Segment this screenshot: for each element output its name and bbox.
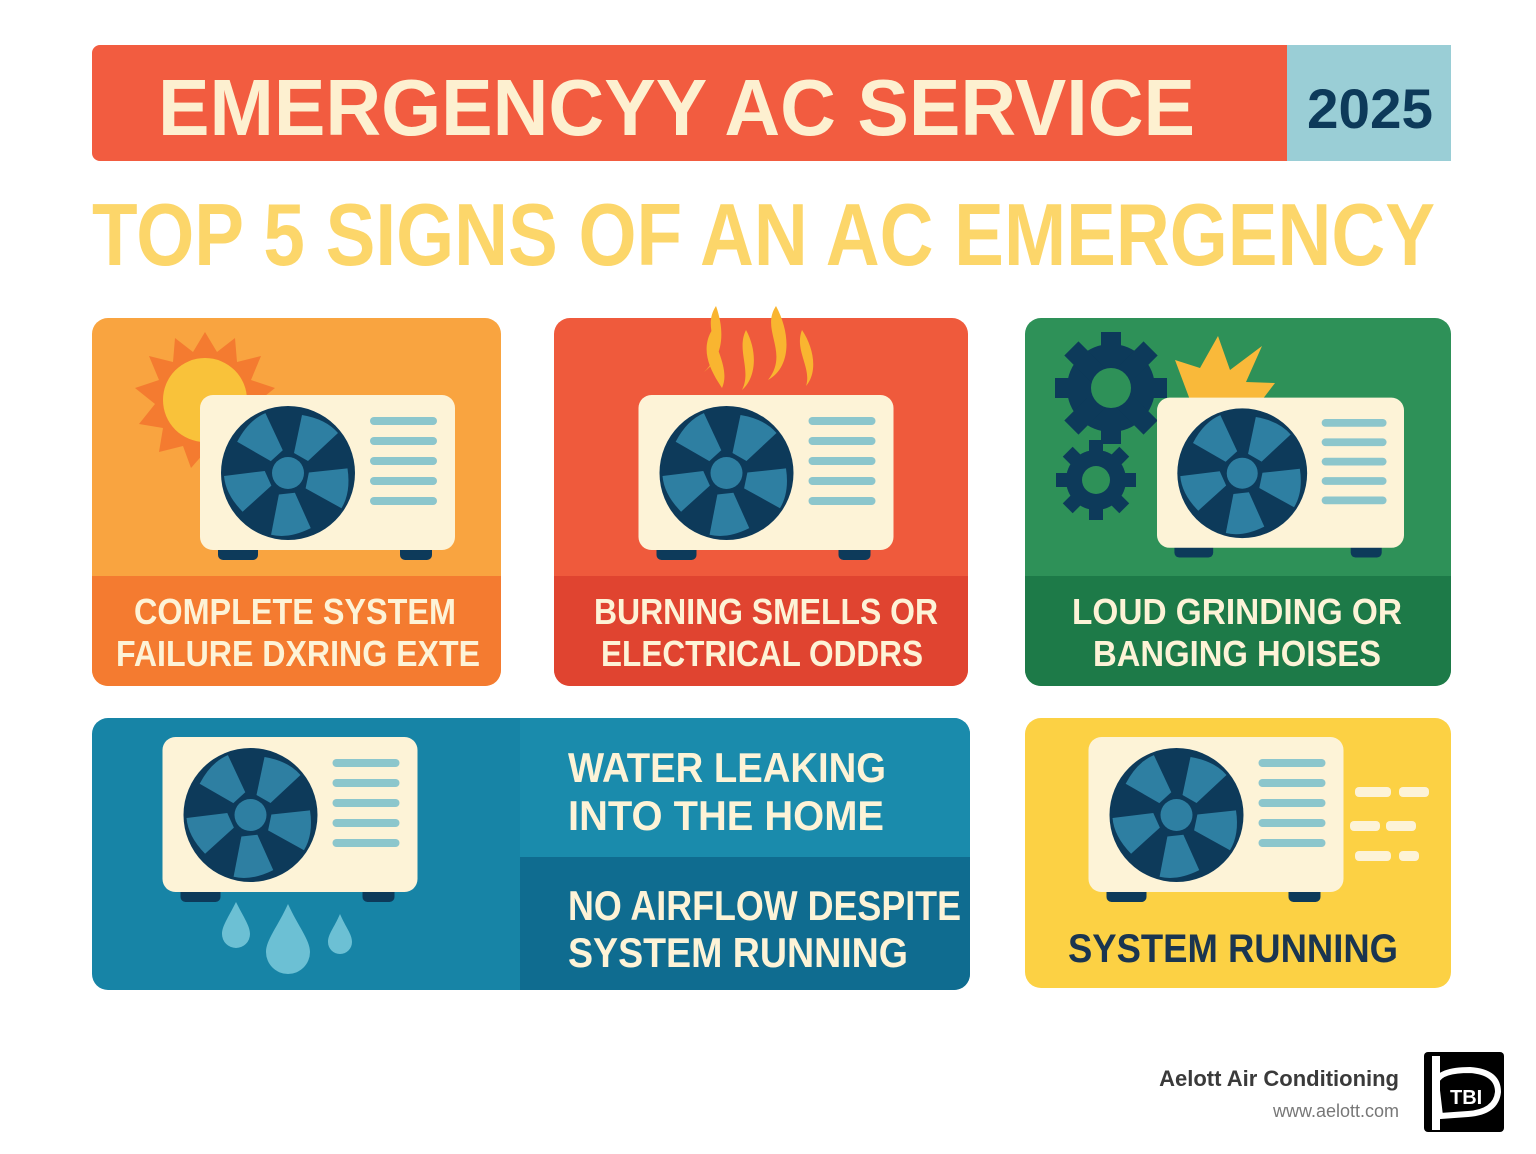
panel: water leaking / no airflow xyxy=(92,718,970,990)
icon: airflow dashes xyxy=(1350,787,1429,861)
label text: COMPLETE SYSTEM xyxy=(134,591,456,632)
icon: ac unit xyxy=(162,737,418,902)
icon: sun xyxy=(135,332,275,468)
footer url: www.aelott.com xyxy=(1272,1101,1399,1121)
icon: ac unit xyxy=(200,395,455,560)
header banner xyxy=(92,45,1451,161)
icon: ac unit xyxy=(638,395,894,560)
label text: FAILURE DXRING EXTE xyxy=(116,633,480,674)
icon: ac unit xyxy=(1088,737,1344,902)
logo: TBI xyxy=(1450,1087,1482,1109)
label text: no airflow: SYSTEM RUNNING xyxy=(568,929,908,976)
panel: system running xyxy=(1025,718,1451,988)
icon: gears xyxy=(1055,332,1167,520)
label text: LOUD GRINDING OR xyxy=(1072,591,1402,632)
panel: complete system failure xyxy=(92,318,501,686)
label text: no airflow: NO AIRFLOW DESPITE xyxy=(568,882,961,929)
header title: EMERGENCYY AC SERVICE xyxy=(158,63,1195,152)
panel: burning smells xyxy=(554,306,968,686)
footer company name: Aelott Air Conditioning xyxy=(1159,1066,1399,1091)
icon: bang burst xyxy=(1175,336,1275,400)
label text: water leaking: INTO THE HOME xyxy=(568,792,884,839)
label text: BANGING HOISES xyxy=(1093,633,1381,674)
icon: ac unit xyxy=(1157,398,1404,557)
label text: BURNING SMELLS OR xyxy=(594,591,938,632)
year badge: 2025 xyxy=(1307,77,1433,140)
logo xyxy=(1424,1052,1504,1132)
panel: loud noises xyxy=(1025,318,1451,686)
label text: SYSTEM RUNNING xyxy=(1068,927,1398,971)
label text: water leaking: WATER LEAKING xyxy=(568,744,886,791)
icon: flames xyxy=(704,306,813,390)
icon: water drops xyxy=(222,902,352,974)
label text: ELECTRICAL ODDRS xyxy=(601,633,923,674)
